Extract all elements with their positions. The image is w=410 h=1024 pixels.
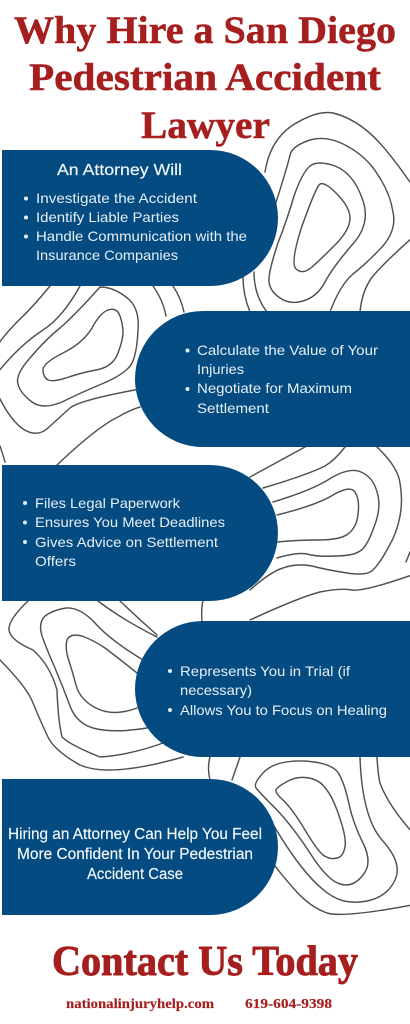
closing statement text: Hiring an Attorney Can Help You Feel bbox=[8, 826, 262, 843]
panel: an attorney will bbox=[2, 150, 278, 286]
bullet list: Represents You in Trial (if bbox=[180, 663, 350, 679]
bullet list bbox=[186, 342, 378, 416]
bullet list: Settlement bbox=[197, 400, 269, 416]
title: Pedestrian Accident bbox=[29, 56, 381, 99]
panel: value and settlement bbox=[135, 311, 410, 447]
closing statement text bbox=[8, 826, 262, 883]
panel: paperwork and deadlines bbox=[2, 465, 278, 601]
bullet list: Ensures You Meet Deadlines bbox=[35, 514, 225, 530]
bullet list: Investigate the Accident bbox=[36, 190, 197, 206]
bullet list: Injuries bbox=[197, 361, 244, 377]
panel: trial and healing bbox=[135, 621, 410, 757]
title: Why Hire a San Diego bbox=[14, 9, 396, 52]
bullet list: Insurance Companies bbox=[36, 247, 178, 263]
bullet list bbox=[23, 495, 225, 569]
topographic contour lines background bbox=[0, 112, 410, 914]
panel: closing statement bbox=[2, 779, 278, 915]
closing statement text: More Confident In Your Pedestrian bbox=[17, 846, 253, 863]
title: Lawyer bbox=[141, 104, 270, 147]
bullet list: Allows You to Focus on Healing bbox=[180, 702, 387, 718]
bullet list: Gives Advice on Settlement bbox=[35, 534, 218, 550]
bullet list bbox=[168, 663, 387, 718]
contact heading: Contact Us Today bbox=[52, 939, 358, 985]
website: nationalinjuryhelp.com bbox=[66, 997, 214, 1012]
panel heading: An Attorney Will bbox=[57, 162, 182, 179]
phone number: 619-604-9398 bbox=[245, 997, 332, 1012]
bullet list: necessary) bbox=[180, 682, 252, 698]
bullet list bbox=[24, 190, 247, 263]
bullet list: Offers bbox=[35, 553, 76, 569]
bullet list: Identify Liable Parties bbox=[36, 209, 179, 225]
bullet list: Files Legal Paperwork bbox=[35, 495, 181, 511]
closing statement text: Accident Case bbox=[87, 866, 183, 883]
bullet list: Handle Communication with the bbox=[36, 228, 247, 244]
title bbox=[14, 9, 396, 147]
bullet list: Calculate the Value of Your bbox=[197, 342, 378, 358]
bullet list: Negotiate for Maximum bbox=[197, 380, 352, 396]
